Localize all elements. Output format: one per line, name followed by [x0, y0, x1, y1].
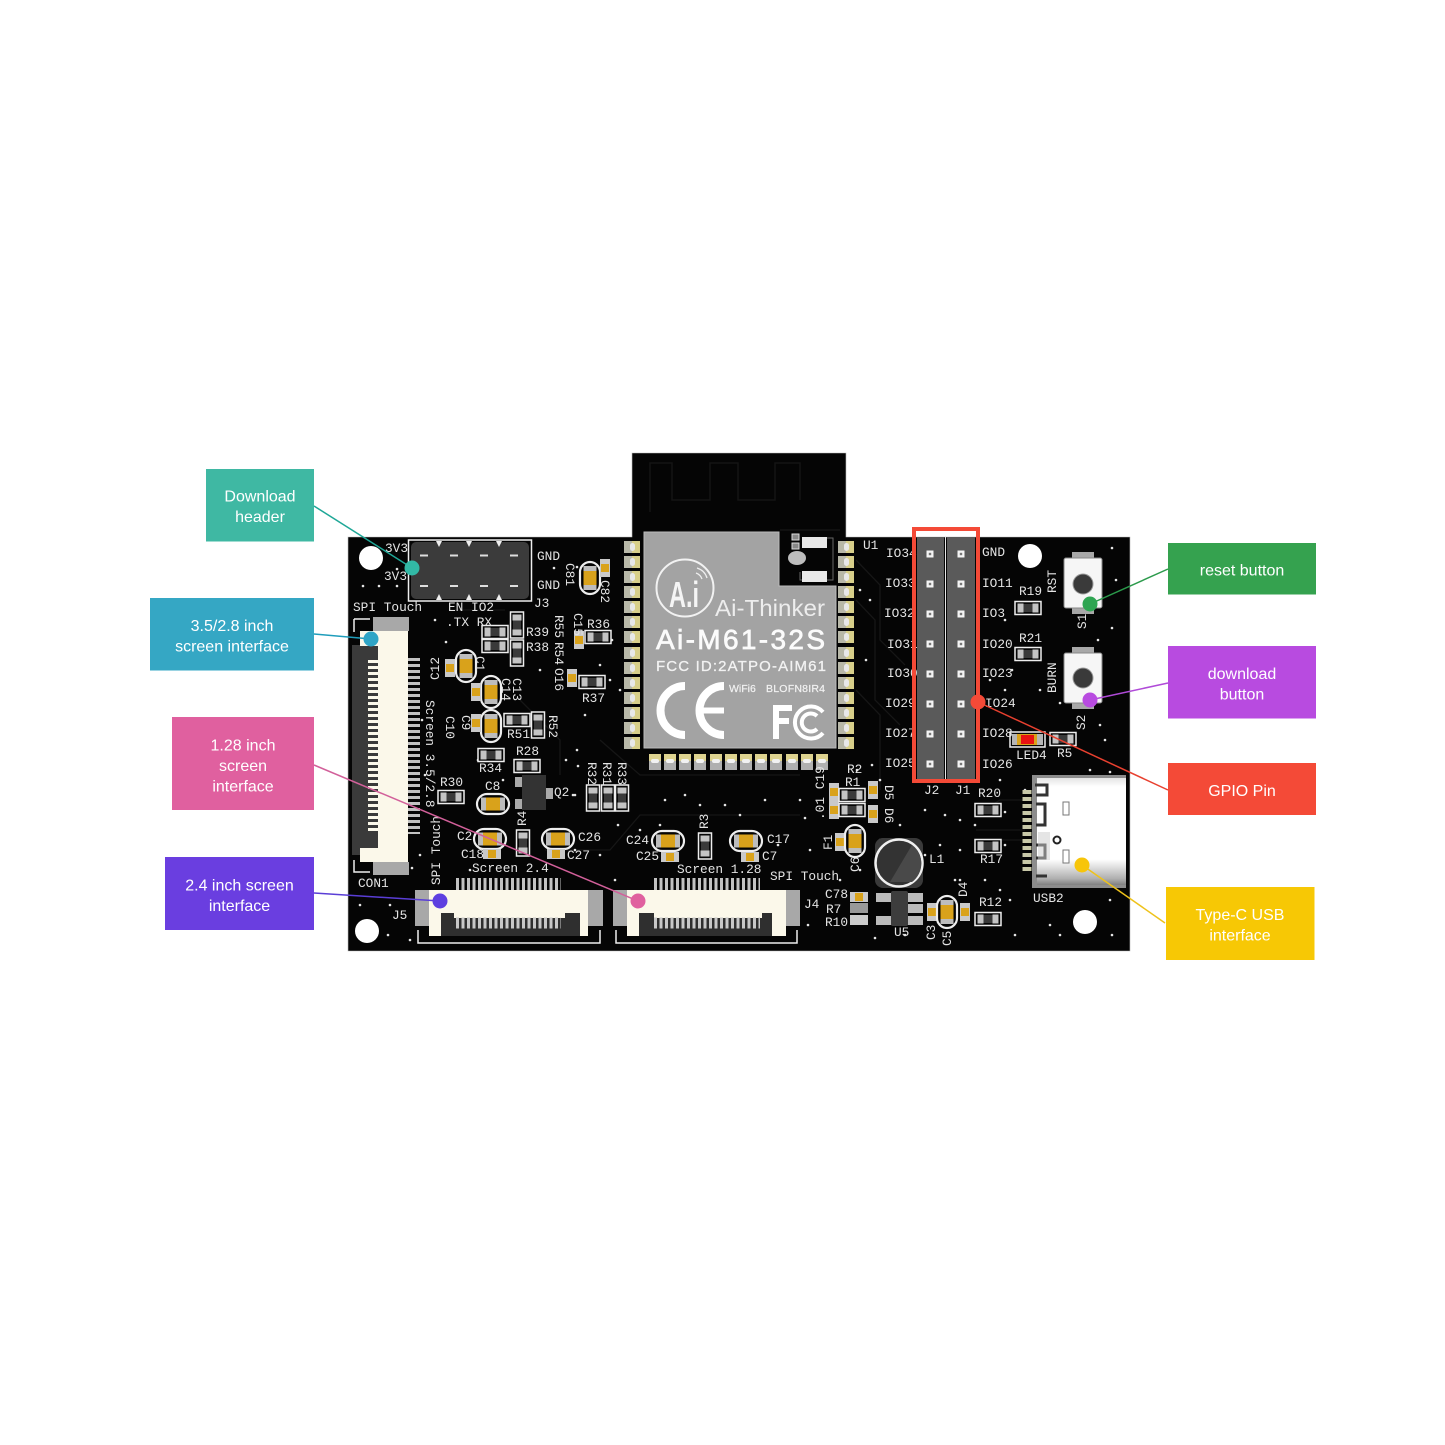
- silkscreen labels: R2: [847, 762, 862, 777]
- silkscreen labels: SPI Touch: [429, 816, 444, 885]
- silkscreen labels: C25: [636, 849, 659, 864]
- silkscreen labels: J3: [534, 596, 549, 611]
- callout: download button: [1082, 646, 1316, 718]
- callout: 3.5/2.8 inch screen interface: 3.5/2.8 inch: [191, 618, 273, 635]
- chip label: BLOFN8IR4: [766, 683, 825, 695]
- silkscreen labels: C15: [570, 613, 585, 636]
- silkscreen labels: LED4: [1016, 748, 1047, 763]
- callout: download button: button: [1220, 686, 1264, 704]
- silkscreen labels: Q2: [554, 785, 569, 800]
- PCB board: [348, 453, 1130, 951]
- silkscreen labels: C6: [848, 857, 863, 872]
- silkscreen labels: D6: [881, 808, 896, 823]
- silkscreen labels: J4: [804, 897, 820, 912]
- silkscreen labels: IO34: [886, 546, 917, 561]
- callout: 2.4 inch screen interface: 2.4 inch screen: [185, 878, 294, 894]
- silkscreen labels: C78: [825, 887, 848, 902]
- silkscreen labels: R12: [979, 895, 1002, 910]
- callout: 3.5/2.8 inch screen interface: [150, 598, 378, 670]
- silkscreen labels: IO29: [885, 696, 916, 711]
- silkscreen labels: Screen 2.4: [472, 861, 549, 876]
- silkscreen labels: IO25: [885, 756, 916, 771]
- silkscreen labels: R3: [697, 814, 712, 829]
- silkscreen labels: IO24: [985, 696, 1016, 711]
- silkscreen labels: GND: [537, 578, 560, 593]
- callout: reset button: reset button: [1200, 562, 1284, 580]
- USB Type-C connector: [1027, 775, 1126, 888]
- reset button S1: [1064, 552, 1102, 614]
- silkscreen labels: R55: [551, 615, 566, 638]
- pcb traces: [450, 560, 1028, 850]
- mounting holes: [355, 544, 1097, 943]
- silkscreen labels: R20: [978, 786, 1001, 801]
- LED4: [1010, 732, 1045, 747]
- module shield: [644, 532, 836, 748]
- callout: download button: download: [1208, 666, 1276, 683]
- silkscreen labels: S1: [1075, 613, 1090, 629]
- callout: reset button: [1082, 543, 1316, 612]
- callout: 1.28 inch screen interface: screen: [219, 758, 267, 775]
- callout: 2.4 inch screen interface: [165, 857, 448, 930]
- callout: Download header: Download: [224, 488, 296, 506]
- silkscreen labels: R1: [845, 775, 861, 790]
- silkscreen labels: CON1: [358, 876, 389, 891]
- board base with antenna: [348, 453, 1130, 951]
- silkscreen labels: R30: [440, 775, 463, 790]
- silkscreen labels: IO23: [982, 666, 1013, 681]
- connector J5: [415, 884, 603, 943]
- silkscreen labels: L1: [929, 852, 945, 867]
- silkscreen labels: 3V3: [385, 541, 408, 556]
- silkscreen labels: SPI Touch: [353, 600, 422, 615]
- CE mark: [660, 686, 724, 735]
- transistor Q2: [515, 775, 553, 810]
- callout: Download header: [206, 469, 420, 576]
- silkscreen labels: IO26: [982, 757, 1013, 772]
- callout: 3.5/2.8 inch screen interface: screen interface: [175, 638, 289, 656]
- silkscreen labels: R51: [507, 727, 530, 742]
- silkscreen labels: C10: [442, 716, 457, 739]
- model name: Ai-M61-32S: [656, 624, 825, 655]
- silkscreen labels: Screen 3.5/2.8: [422, 700, 437, 808]
- silkscreen labels: U5: [894, 925, 909, 940]
- brand name: Ai-Thinker: [715, 595, 825, 621]
- silkscreen labels: R39: [526, 625, 549, 640]
- silkscreen labels: R31: [599, 762, 614, 785]
- module pads right: [838, 541, 854, 749]
- silkscreen labels: R33: [614, 762, 629, 785]
- silkscreen labels: C12: [428, 657, 443, 680]
- silkscreen labels: C26: [578, 830, 601, 845]
- silkscreen labels: GND: [537, 549, 560, 564]
- silkscreen labels: EN IO2: [448, 600, 494, 615]
- silkscreen labels: F1: [821, 834, 836, 850]
- silkscreen labels: C14: [498, 678, 513, 701]
- callout: GPIO Pin: [970, 694, 1316, 815]
- wifi label: WiFi6: [729, 683, 756, 695]
- callout: Type-C USB interface: Type-C USB: [1196, 907, 1284, 924]
- callout: Type-C USB interface: interface: [1209, 928, 1271, 944]
- callout: Type-C USB interface: [1074, 858, 1314, 960]
- silkscreen labels: IO3: [982, 606, 1005, 621]
- silkscreen labels: IO27: [885, 726, 916, 741]
- callout: GPIO Pin: GPIO Pin: [1208, 783, 1276, 800]
- silkscreen labels: C82: [597, 580, 612, 603]
- via dots: [360, 548, 1116, 940]
- logo Ai: [656, 560, 714, 616]
- silkscreen labels: D4: [956, 881, 971, 897]
- silkscreen labels: C13: [509, 678, 524, 701]
- silkscreen labels: IO30: [887, 666, 918, 681]
- inductor L1: [875, 838, 923, 888]
- silkscreen labels: .01 C19: [813, 766, 828, 820]
- silkscreen labels: IO28: [982, 726, 1013, 741]
- silkscreen labels: C27: [567, 848, 590, 863]
- silkscreen labels: R36: [587, 617, 610, 632]
- silkscreen labels: C2: [457, 829, 472, 844]
- silkscreen labels: C24: [626, 833, 649, 848]
- silkscreen labels: D5: [881, 785, 896, 800]
- silkscreen labels: RST: [1045, 570, 1060, 593]
- silkscreen labels: R52: [545, 715, 560, 738]
- silkscreen labels: [353, 538, 1090, 946]
- silkscreen labels: C1: [472, 656, 487, 672]
- callout: Download header: header: [235, 509, 286, 526]
- silkscreen labels: C7: [762, 849, 777, 864]
- logo Ai: A.i: [669, 574, 699, 615]
- FCC id: FCC ID:2ATPO-AIM61: [656, 658, 826, 675]
- silkscreen labels: C9: [458, 715, 473, 730]
- download header J3: [408, 540, 532, 601]
- connector J4: [613, 884, 800, 943]
- silkscreen labels: R7: [826, 902, 841, 917]
- silkscreen labels: SPI Touch: [770, 869, 839, 884]
- silkscreen labels: USB2: [1033, 891, 1064, 906]
- regulator U5: [876, 891, 923, 926]
- silkscreen labels: IO20: [982, 637, 1013, 652]
- callout: 2.4 inch screen interface: interface: [209, 898, 270, 915]
- callout: 1.28 inch screen interface: 1.28 inch: [211, 738, 275, 754]
- silkscreen labels: R4: [515, 810, 530, 826]
- module pads left: [624, 541, 640, 749]
- silkscreen labels: S2: [1074, 715, 1089, 730]
- silkscreen labels: R28: [516, 744, 539, 759]
- silkscreen labels: .TX RX: [446, 615, 492, 630]
- module antenna parts: [788, 534, 833, 582]
- silkscreen labels: BURN: [1045, 662, 1060, 693]
- silkscreen labels: Screen 1.28: [677, 862, 761, 877]
- silkscreen labels: 3V3: [384, 569, 407, 584]
- silkscreen labels: R17: [980, 852, 1003, 867]
- FC mark: [776, 706, 823, 739]
- GPIO highlight frame: [914, 529, 978, 781]
- silkscreen labels: J1: [955, 783, 971, 798]
- silkscreen labels: C81: [562, 563, 577, 586]
- silkscreen labels: C3: [924, 925, 939, 940]
- silkscreen labels: IO11: [982, 576, 1013, 591]
- GPIO pin headers: [917, 537, 975, 780]
- connector CON1: [352, 617, 414, 875]
- antenna trace: [650, 463, 840, 530]
- silkscreen labels: R37: [582, 691, 605, 706]
- silkscreen labels: R34: [479, 761, 502, 776]
- callout: 1.28 inch screen interface: [172, 717, 646, 908]
- callout: 1.28 inch screen interface: interface: [212, 778, 274, 796]
- silkscreen labels: IO32: [884, 606, 915, 621]
- silkscreen labels: R54: [551, 642, 566, 665]
- silkscreen labels: C17: [767, 832, 790, 847]
- silkscreen labels: R19: [1019, 584, 1042, 599]
- silkscreen labels: R32: [584, 762, 599, 785]
- module pads bottom: [649, 754, 828, 770]
- passive components: [438, 559, 1076, 928]
- silkscreen labels: GND: [982, 545, 1005, 560]
- silkscreen labels: IO33: [885, 576, 916, 591]
- silkscreen labels: IO31: [887, 637, 918, 652]
- download button S2: [1064, 647, 1102, 709]
- silkscreen labels: R38: [526, 640, 549, 655]
- silkscreen labels: U1: [863, 538, 879, 553]
- module Ai-M61-32S: [624, 532, 854, 770]
- silkscreen labels: J2: [924, 783, 939, 798]
- silkscreen labels: J5: [392, 908, 407, 923]
- silkscreen labels: C8: [485, 779, 500, 794]
- silkscreen labels: O16: [551, 668, 566, 691]
- silkscreen labels: C5: [940, 931, 955, 946]
- silkscreen labels: C18: [461, 847, 484, 862]
- silkscreen labels: R10: [825, 915, 848, 930]
- silkscreen labels: R21: [1019, 631, 1042, 646]
- silkscreen labels: R5: [1057, 746, 1072, 761]
